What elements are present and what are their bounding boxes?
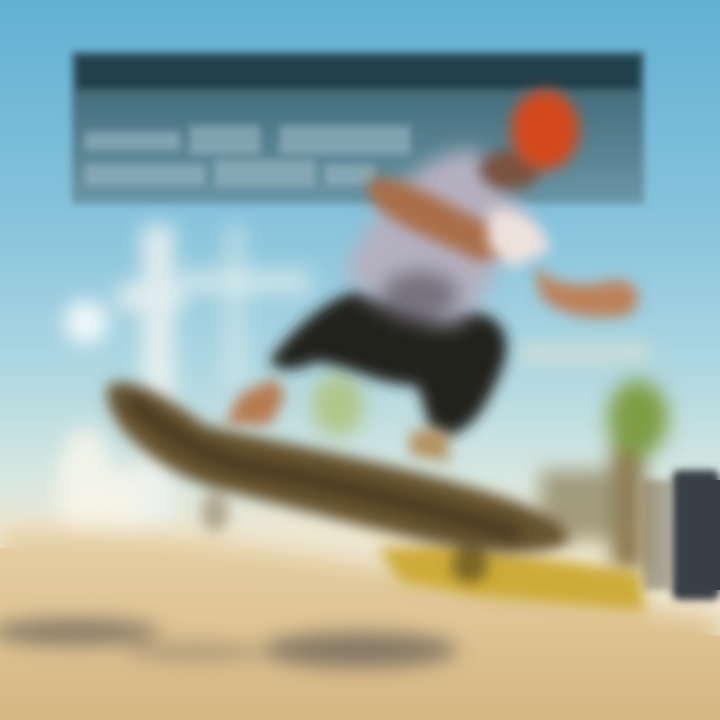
arm right (535, 265, 638, 317)
skater figure (225, 90, 638, 462)
banner blurred text block (85, 126, 410, 186)
cactus and shrub (312, 373, 668, 570)
sand ground (0, 529, 720, 720)
red cap (511, 90, 579, 170)
arm left (368, 178, 510, 262)
shirt sleeve (488, 209, 550, 268)
board shadow on the sand (0, 619, 458, 668)
skateboard deck (107, 382, 570, 583)
legs and shorts (270, 290, 506, 436)
dark object at right edge (642, 470, 720, 600)
white wind turbines in the background (57, 225, 650, 552)
head and beard (480, 150, 540, 190)
legs skin (225, 378, 450, 462)
shirt (345, 150, 530, 325)
yellow board underside (378, 545, 645, 612)
banner dark heading strip (76, 56, 640, 90)
banner panel (72, 52, 644, 204)
